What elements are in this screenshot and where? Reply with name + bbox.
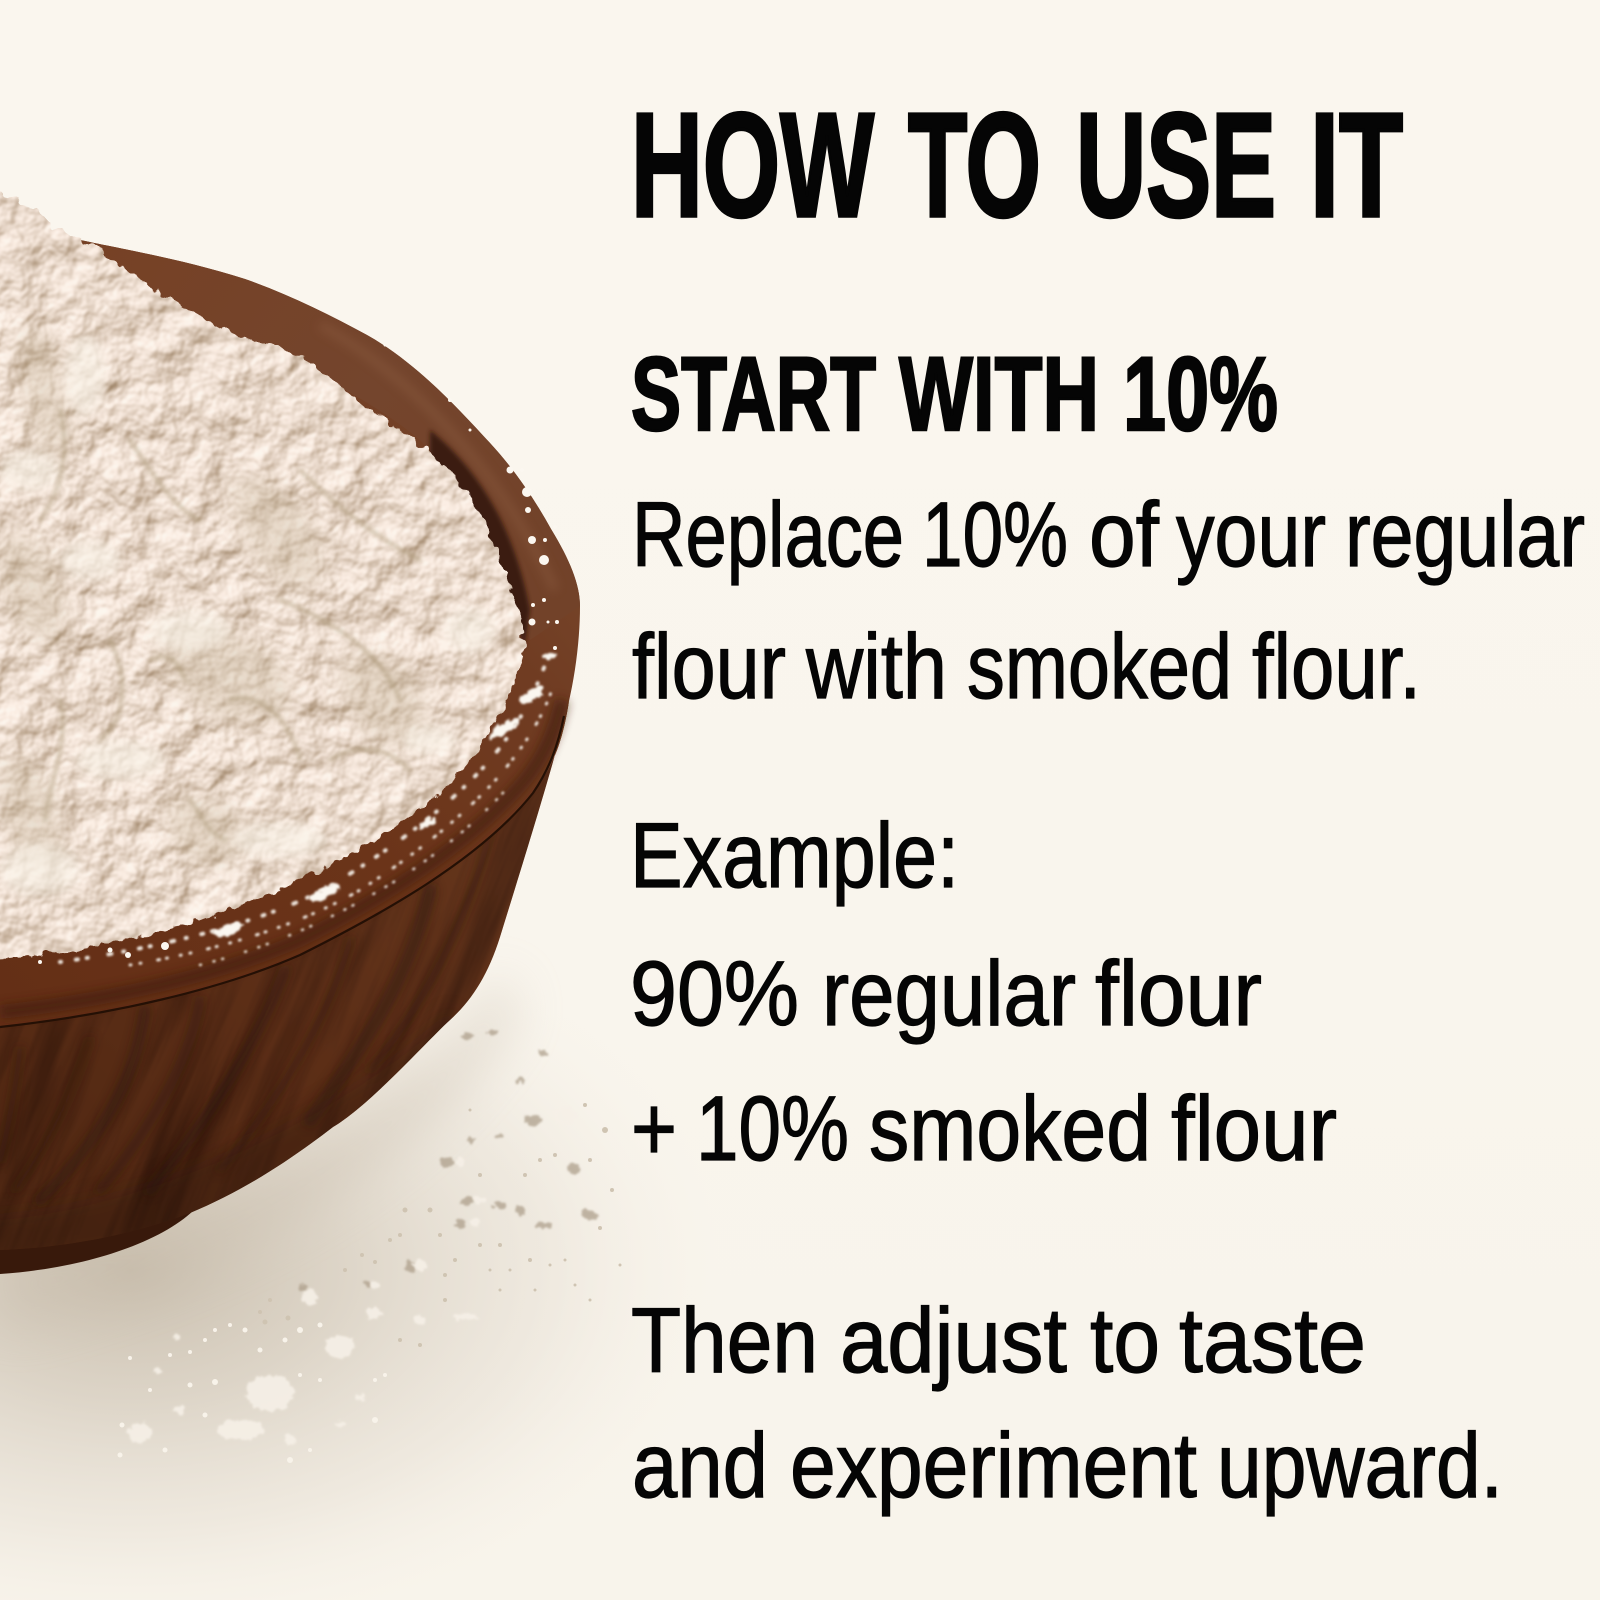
example text: 90% xyxy=(630,943,799,1045)
instruction text: your xyxy=(1176,484,1326,586)
flour soft shading xyxy=(0,327,425,867)
contact shadow along bowl xyxy=(0,970,520,1330)
example text: Example: xyxy=(630,805,959,907)
instruction text: flour. xyxy=(1252,616,1421,718)
rim lower shade xyxy=(0,700,562,1012)
title: IT xyxy=(1310,83,1403,248)
closing text: experiment xyxy=(790,1415,1197,1517)
example text: smoked xyxy=(869,1078,1151,1180)
back rim xyxy=(60,235,580,640)
rim and bowl interior xyxy=(0,235,580,1027)
dusted rim speckle xyxy=(60,665,555,965)
title xyxy=(631,83,1403,248)
bowl foot xyxy=(0,1208,196,1274)
dusting clusters xyxy=(210,653,556,940)
dark inner rim gap xyxy=(430,430,530,650)
subheading: START xyxy=(631,336,876,453)
darker upper crumbs xyxy=(299,1029,598,1290)
example text: 10% xyxy=(696,1078,849,1180)
title: USE xyxy=(1076,83,1276,248)
individual specks xyxy=(38,314,559,964)
flour mound xyxy=(0,188,524,960)
instruction text: smoked xyxy=(967,616,1232,718)
closing text: adjust xyxy=(840,1290,1067,1392)
instruction text: Replace xyxy=(632,484,904,586)
subheading xyxy=(631,336,1278,453)
title: TO xyxy=(908,83,1041,248)
pale crumbs xyxy=(128,1107,577,1445)
bowl outer body with grain xyxy=(0,702,569,1250)
rim highlight xyxy=(320,325,555,590)
flour crease lines xyxy=(40,410,420,840)
rim groove line xyxy=(0,716,564,1027)
closing text xyxy=(631,1290,1503,1517)
example text: flour xyxy=(1171,1078,1337,1180)
ground shadow under bowl xyxy=(0,820,780,1600)
instruction text: of xyxy=(1089,484,1159,586)
example text: regular xyxy=(822,943,1076,1045)
text column xyxy=(630,83,1585,1517)
instruction text: flour xyxy=(632,616,786,718)
spilled flour on surface xyxy=(118,1029,622,1463)
body bottom shading xyxy=(0,1018,452,1250)
instruction text: with xyxy=(805,616,947,718)
closing text: upward. xyxy=(1217,1415,1503,1517)
wooden bowl xyxy=(0,240,580,1274)
closing text: taste xyxy=(1179,1290,1366,1392)
subheading: WITH xyxy=(899,336,1099,453)
closing text: to xyxy=(1090,1290,1160,1392)
flour base shape xyxy=(0,188,524,960)
example text xyxy=(630,805,1337,1180)
closing text: and xyxy=(632,1415,768,1517)
closing text: Then xyxy=(631,1290,818,1392)
powder on rim xyxy=(38,314,559,965)
example text: flour xyxy=(1095,943,1262,1045)
fine specks xyxy=(258,1103,622,1347)
instruction text xyxy=(632,484,1585,718)
subheading: 10% xyxy=(1123,336,1278,453)
title: HOW xyxy=(631,83,874,248)
example text: + xyxy=(631,1078,677,1180)
flour bright lumps xyxy=(0,335,496,896)
instruction text: 10% xyxy=(922,484,1068,586)
